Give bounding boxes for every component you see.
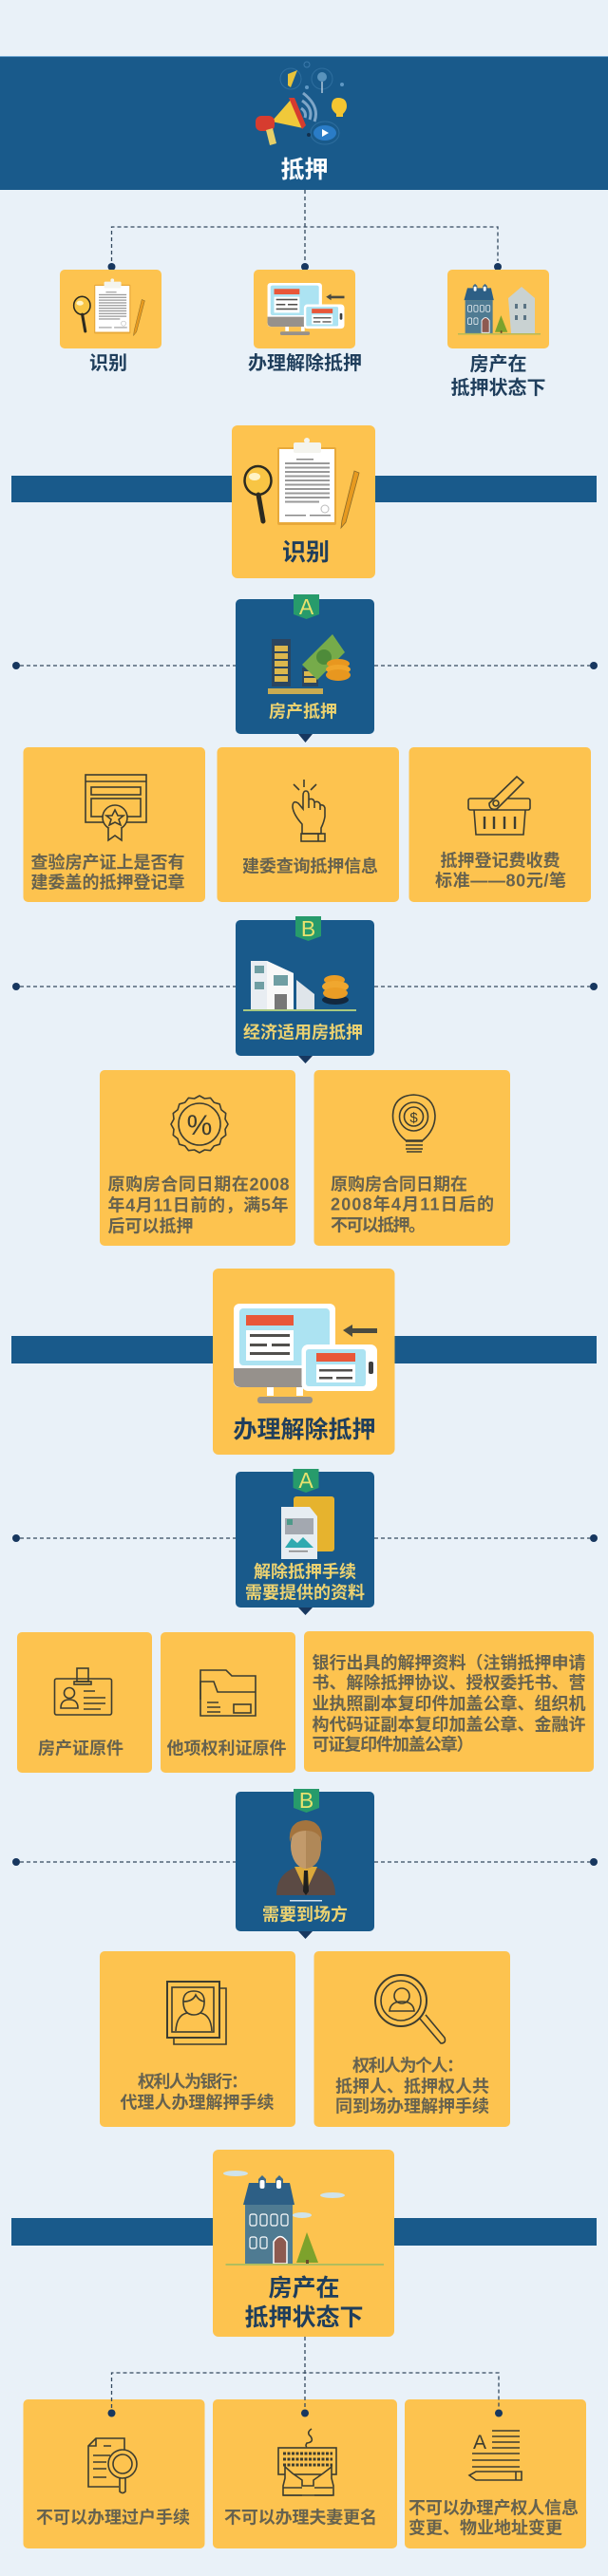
icon: percent badge: %	[187, 1110, 212, 1141]
card: 过户手续: 不可以办理过户手续	[36, 2507, 190, 2528]
connectors from header	[108, 190, 502, 271]
icon: pointing hand	[293, 780, 325, 841]
section title card: 识别	[282, 539, 330, 566]
icon: basket	[468, 777, 530, 835]
badge B	[294, 1788, 319, 1813]
card: 收费标准	[408, 747, 591, 902]
card: 产权人信息变更: 不可以办理产权人信息	[408, 2497, 579, 2518]
header band	[0, 56, 608, 190]
section title card: 房产在	[268, 2275, 340, 2302]
card: 他项权利证原件	[161, 1632, 295, 1773]
card: 收费标准: 标准——80元/笔	[435, 872, 566, 891]
overview card: 办理解除抵押: 办理解除抵押	[248, 351, 362, 374]
card: 产权人信息变更	[405, 2399, 586, 2548]
section title card: 办理解除抵押	[233, 1416, 376, 1443]
overview card: 办理解除抵押	[248, 270, 362, 374]
card: 银行资料: 业执照副本复印件加盖公章、组织机	[312, 1694, 585, 1713]
blue label card	[236, 1472, 374, 1615]
icon: keyboard	[278, 2429, 336, 2495]
icon: buildings and money	[268, 634, 351, 694]
card: 权利人为个人	[314, 1951, 510, 2127]
section band: 房产在抵押状态下	[11, 2150, 597, 2337]
icon: folder	[200, 1670, 256, 1716]
divider A: 解除抵押手续	[12, 1468, 598, 1615]
card: 2008年后	[314, 1070, 510, 1246]
card: 查验房产证: 建委盖的抵押登记章	[30, 872, 184, 893]
card: 建委查询: 建委查询抵押信息	[242, 856, 378, 875]
card: 权利人为个人: 抵押人、抵押权人共	[335, 2078, 489, 2097]
divider A: 房产抵押	[12, 594, 598, 743]
icon: text and pencil	[469, 2431, 522, 2480]
icon: dollar bulb	[393, 1095, 435, 1152]
card: 夫妻更名	[213, 2399, 397, 2548]
badge A	[293, 1468, 319, 1493]
card: 查验房产证	[23, 747, 205, 902]
badge B: B	[299, 1788, 314, 1813]
section title card	[213, 1269, 395, 1455]
icon: percent badge	[171, 1096, 228, 1153]
card: 过户手续	[23, 2399, 205, 2548]
badge A: A	[298, 1468, 314, 1493]
overview card: 识别: 识别	[89, 352, 127, 374]
blue label card: 需要提供的资料	[245, 1582, 365, 1603]
card: 权利人为个人: 权利人为个人：	[352, 2057, 464, 2076]
card: 权利人为个人: 同到场办理解押手续	[335, 2097, 489, 2115]
section title card	[213, 2150, 394, 2337]
blue label card: 经济适用房抵押	[243, 1024, 363, 1043]
section title card	[232, 425, 375, 578]
card: 房产证原件: 房产证原件	[38, 1739, 124, 1758]
card: 银行资料: 银行出具的解押资料（注销抵押申请	[312, 1654, 585, 1673]
overview card: 房产在抵押状态下: 抵押状态下	[450, 376, 545, 399]
card: 2008年前: 原购房合同日期在2008	[108, 1174, 289, 1194]
blue label card: 解除抵押手续	[254, 1561, 356, 1582]
card: 产权人信息变更: 变更、物业地址变更	[408, 2518, 562, 2537]
blue label card	[236, 920, 374, 1063]
badge B: B	[301, 916, 315, 941]
blue label card: 房产抵押	[269, 703, 337, 722]
icon: certificate	[86, 775, 146, 840]
icon: businessman	[276, 1820, 335, 1901]
card: 权利人为银行: 代理人办理解押手续	[120, 2093, 274, 2112]
card: 银行资料: 构代码证副本复印加盖公章、金融许	[312, 1715, 585, 1734]
card: 银行资料: 可证复印件加盖公章）	[312, 1734, 473, 1755]
icon: dollar bulb: $	[409, 1110, 418, 1126]
card: 夫妻更名: 不可以办理夫妻更名	[224, 2509, 377, 2528]
icon: photo	[167, 1982, 226, 2044]
section band: 识别	[11, 425, 597, 578]
card: 收费标准: 抵押登记费收费	[441, 851, 560, 870]
blue label card: 需要到场方	[262, 1905, 348, 1924]
card: 2008年前: 年4月11日前的，满5年	[108, 1194, 289, 1215]
divider B: 需要到场方	[12, 1788, 598, 1939]
icon: house and coins	[243, 961, 356, 1011]
card: 银行资料	[304, 1631, 594, 1772]
overview card: 房产在抵押状态下: 房产在	[469, 353, 526, 375]
blue label card	[236, 1792, 374, 1939]
card: 他项权利证原件: 他项权利证原件	[167, 1739, 287, 1758]
connectors to final cards	[108, 2337, 503, 2417]
card: 2008年后: 不可以抵押。	[331, 1215, 426, 1234]
card: 2008年后: 原购房合同日期在	[331, 1174, 467, 1194]
card: 2008年后: 2008年4月11日后的	[331, 1194, 494, 1213]
icon: megaphone with ideas	[256, 62, 347, 145]
card: 权利人为银行: 权利人为银行：	[138, 2072, 248, 2091]
blue label card	[236, 599, 374, 743]
card: 建委查询	[217, 747, 399, 902]
icon: person magnifier	[375, 1975, 445, 2043]
overview card: 识别	[60, 270, 162, 374]
card: 2008年前: 后可以抵押	[108, 1217, 194, 1236]
badge A	[294, 594, 319, 619]
icon: documents	[281, 1496, 334, 1559]
card: 权利人为银行	[100, 1951, 295, 2127]
overview card: 房产在抵押状态下	[447, 270, 549, 399]
card: 2008年前	[100, 1070, 295, 1246]
section title card: 抵押状态下	[244, 2304, 364, 2331]
divider B: 经济适用房抵押	[12, 916, 598, 1063]
badge A: A	[299, 594, 314, 619]
card: 银行资料: 书、解除抵押协议、授权委托书、营	[312, 1673, 585, 1692]
card: 查验房产证: 查验房产证上是否有	[30, 853, 184, 872]
badge B	[295, 916, 321, 941]
section band: 办理解除抵押	[11, 1269, 597, 1455]
icon: ID badge	[55, 1668, 112, 1715]
icon: document with magnifier	[88, 2438, 137, 2493]
icon: text and pencil: A	[473, 2432, 486, 2454]
card: 房产证原件	[17, 1632, 152, 1773]
title: 抵押	[280, 157, 329, 183]
